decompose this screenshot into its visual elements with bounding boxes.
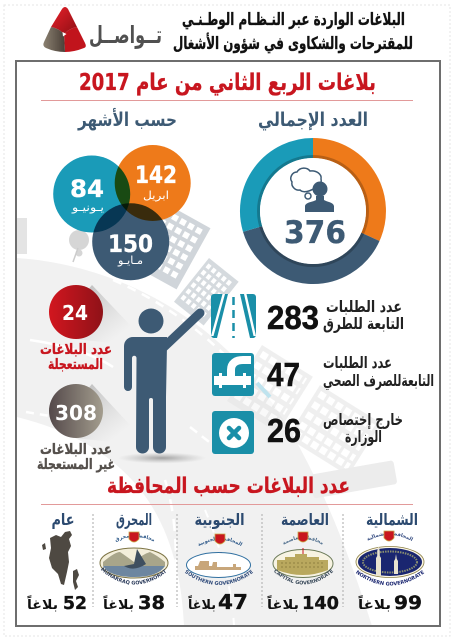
title: بلاغات الربع الثاني من عام 2017 [79, 70, 376, 96]
logo mark [43, 7, 86, 52]
urgent reports: المستعجلة [48, 357, 103, 373]
emblem: Muharraq: محافظة المحرق [116, 534, 154, 542]
map of Bahrain [42, 531, 79, 590]
non-urgent reports: عدد البلاغات [40, 442, 112, 458]
emblem: Muharraq: MUHARRAQ GOVERNORATE [100, 567, 166, 585]
non-urgent reports: غير المستعجلة [37, 457, 115, 473]
urgent reports: 24 [62, 301, 88, 325]
May [108, 230, 153, 267]
emblem: Capital: محافظة العاصمة [283, 536, 323, 544]
governorate: Northern [356, 510, 424, 614]
icon: pipe [212, 353, 254, 396]
emblem: Northern: المحافظة الشمالية [368, 532, 414, 541]
emblem: Northern: NORTHERN GOVERNORATE [356, 570, 424, 586]
person figure [118, 308, 206, 464]
stat: out of ministry scope [212, 410, 403, 454]
faint buildings right [254, 345, 381, 470]
emblem: Southern [185, 534, 254, 585]
May: مـايـو [117, 254, 143, 267]
general: بلاغاً [27, 595, 58, 613]
urgent reports [40, 285, 130, 373]
emblem: Capital [272, 532, 334, 584]
heading: by month: حسب الأشهر [77, 108, 177, 131]
governorate: Southern: الجنوبية [194, 510, 244, 529]
April: ابريل [143, 189, 169, 202]
general [27, 510, 87, 614]
heading: total: العدد الإجمالي [258, 109, 368, 131]
governorate: Muharraq [100, 510, 168, 614]
May: 150 [108, 230, 153, 258]
background building 1 [150, 210, 210, 290]
donut chart: total [250, 148, 376, 274]
governorate: Capital: العاصمة [281, 510, 329, 529]
general: 52 [63, 593, 87, 614]
June: يـونيـو [71, 201, 104, 214]
emblem: Southern: المحافظة الجنوبية [198, 536, 243, 546]
background building 2 [174, 258, 239, 325]
header text [173, 10, 413, 54]
emblem: Northern [356, 530, 424, 586]
non-urgent reports [37, 384, 130, 473]
emblem: Capital: CAPITAL GOVERNORATE [274, 569, 334, 584]
emblem: Southern: SOUTHERN GOVERNORATE [185, 570, 254, 585]
governorate: Northern: بلاغاً [358, 595, 391, 613]
stat: out of ministry scope: 26 [267, 412, 301, 449]
stat: out of ministry scope: خارج إختصاص [323, 410, 403, 429]
icon: road [211, 294, 256, 338]
June: 84 [70, 175, 104, 203]
background road and buildings [17, 203, 397, 626]
governorate: Muharraq: بلاغاً [103, 595, 134, 613]
stat: out of ministry scope: الوزارة [345, 427, 382, 446]
governorate: Muharraq: 38 [138, 592, 165, 614]
governorate: Southern [185, 510, 254, 614]
icon: person thinking [291, 168, 334, 212]
governorate: Northern: 99 [394, 592, 422, 614]
governorate: Muharraq: المحرق [116, 510, 152, 529]
governorate: Northern: الشمالية [366, 510, 418, 529]
urgent reports: عدد البلاغات [40, 342, 112, 358]
stat: roads: عدد الطلبات [326, 297, 402, 316]
total number: 376 [284, 215, 346, 251]
April [135, 161, 177, 202]
governorate: Capital: 140 [302, 593, 339, 614]
venn circles: by month [53, 145, 191, 280]
governorate: Capital [267, 510, 339, 614]
stat: sewage [212, 353, 434, 396]
governorate: Southern: بلاغاً [188, 595, 216, 613]
stat: sewage: 47 [267, 356, 300, 393]
emblem: Muharraq [100, 532, 168, 585]
logo wordmark: تــواصــل [89, 21, 162, 49]
stat: roads: 283 [267, 299, 319, 336]
icon: cross [212, 411, 254, 454]
stat: roads [211, 294, 404, 338]
section title: by governorate: عدد البلاغات حسب المحافظة [107, 474, 350, 499]
April: 142 [135, 161, 177, 189]
governorate: Southern: 47 [218, 590, 248, 614]
non-urgent reports: 308 [55, 401, 97, 425]
governorate: Capital: بلاغاً [267, 595, 299, 613]
general: عام [52, 510, 74, 529]
stat: sewage: عدد الطلبات [323, 353, 392, 372]
stat: roads: التابعة للطرق [323, 314, 404, 333]
logo [43, 7, 162, 52]
